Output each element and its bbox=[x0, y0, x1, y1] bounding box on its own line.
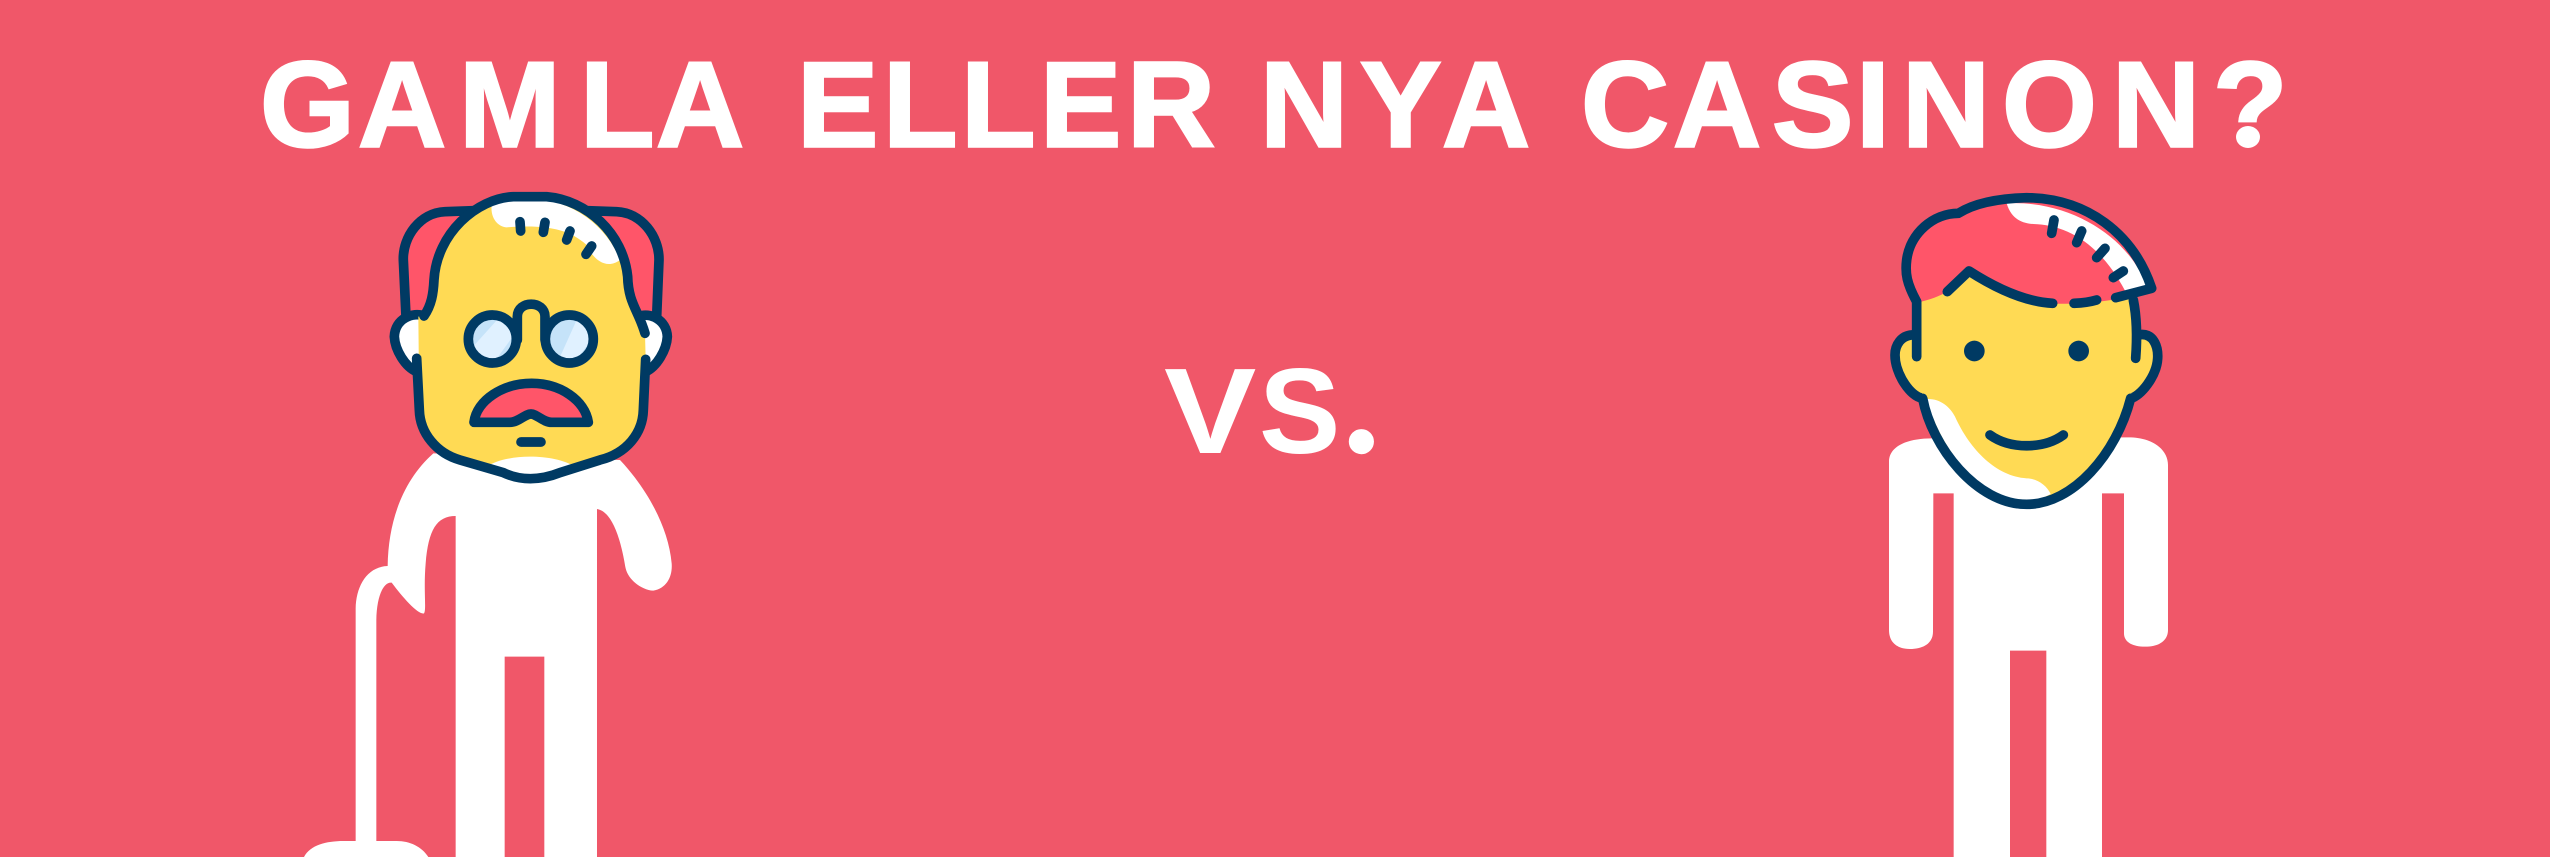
old man hair bbox=[403, 211, 659, 317]
young man hair highlight bbox=[2007, 203, 2146, 291]
young man hair fill bbox=[1906, 198, 2152, 304]
young man body bbox=[1889, 437, 2168, 857]
old man mouth bbox=[521, 427, 541, 456]
character: young man bbox=[1889, 198, 2168, 857]
old man body and cane bbox=[304, 453, 672, 857]
young man ears bbox=[1895, 335, 2158, 398]
character: old man with cane bbox=[304, 197, 672, 857]
old man forehead highlight bbox=[491, 198, 620, 264]
old man glasses bbox=[468, 304, 597, 363]
versus label: V bbox=[1164, 343, 1256, 479]
infographic canvas bbox=[264, 60, 2282, 857]
young man face fill bbox=[1917, 253, 2136, 504]
old man head bbox=[394, 197, 667, 479]
versus label: S bbox=[1259, 343, 1340, 479]
young man smile bbox=[1990, 435, 2063, 446]
old man moustache bbox=[474, 383, 588, 422]
versus label: . bbox=[1342, 314, 1381, 486]
old man head outline bbox=[417, 197, 646, 479]
old man ears bbox=[394, 315, 667, 372]
versus label bbox=[1164, 314, 1381, 486]
old man face fill bbox=[418, 197, 646, 479]
young man face highlight bbox=[1927, 399, 2051, 501]
young man outline bbox=[1906, 198, 2152, 504]
young man head bbox=[1895, 198, 2158, 504]
old man chin highlight bbox=[487, 457, 575, 479]
young man eyes bbox=[1964, 341, 2089, 361]
title: GAMLA ELLER NYA CASINON? bbox=[260, 36, 2288, 172]
